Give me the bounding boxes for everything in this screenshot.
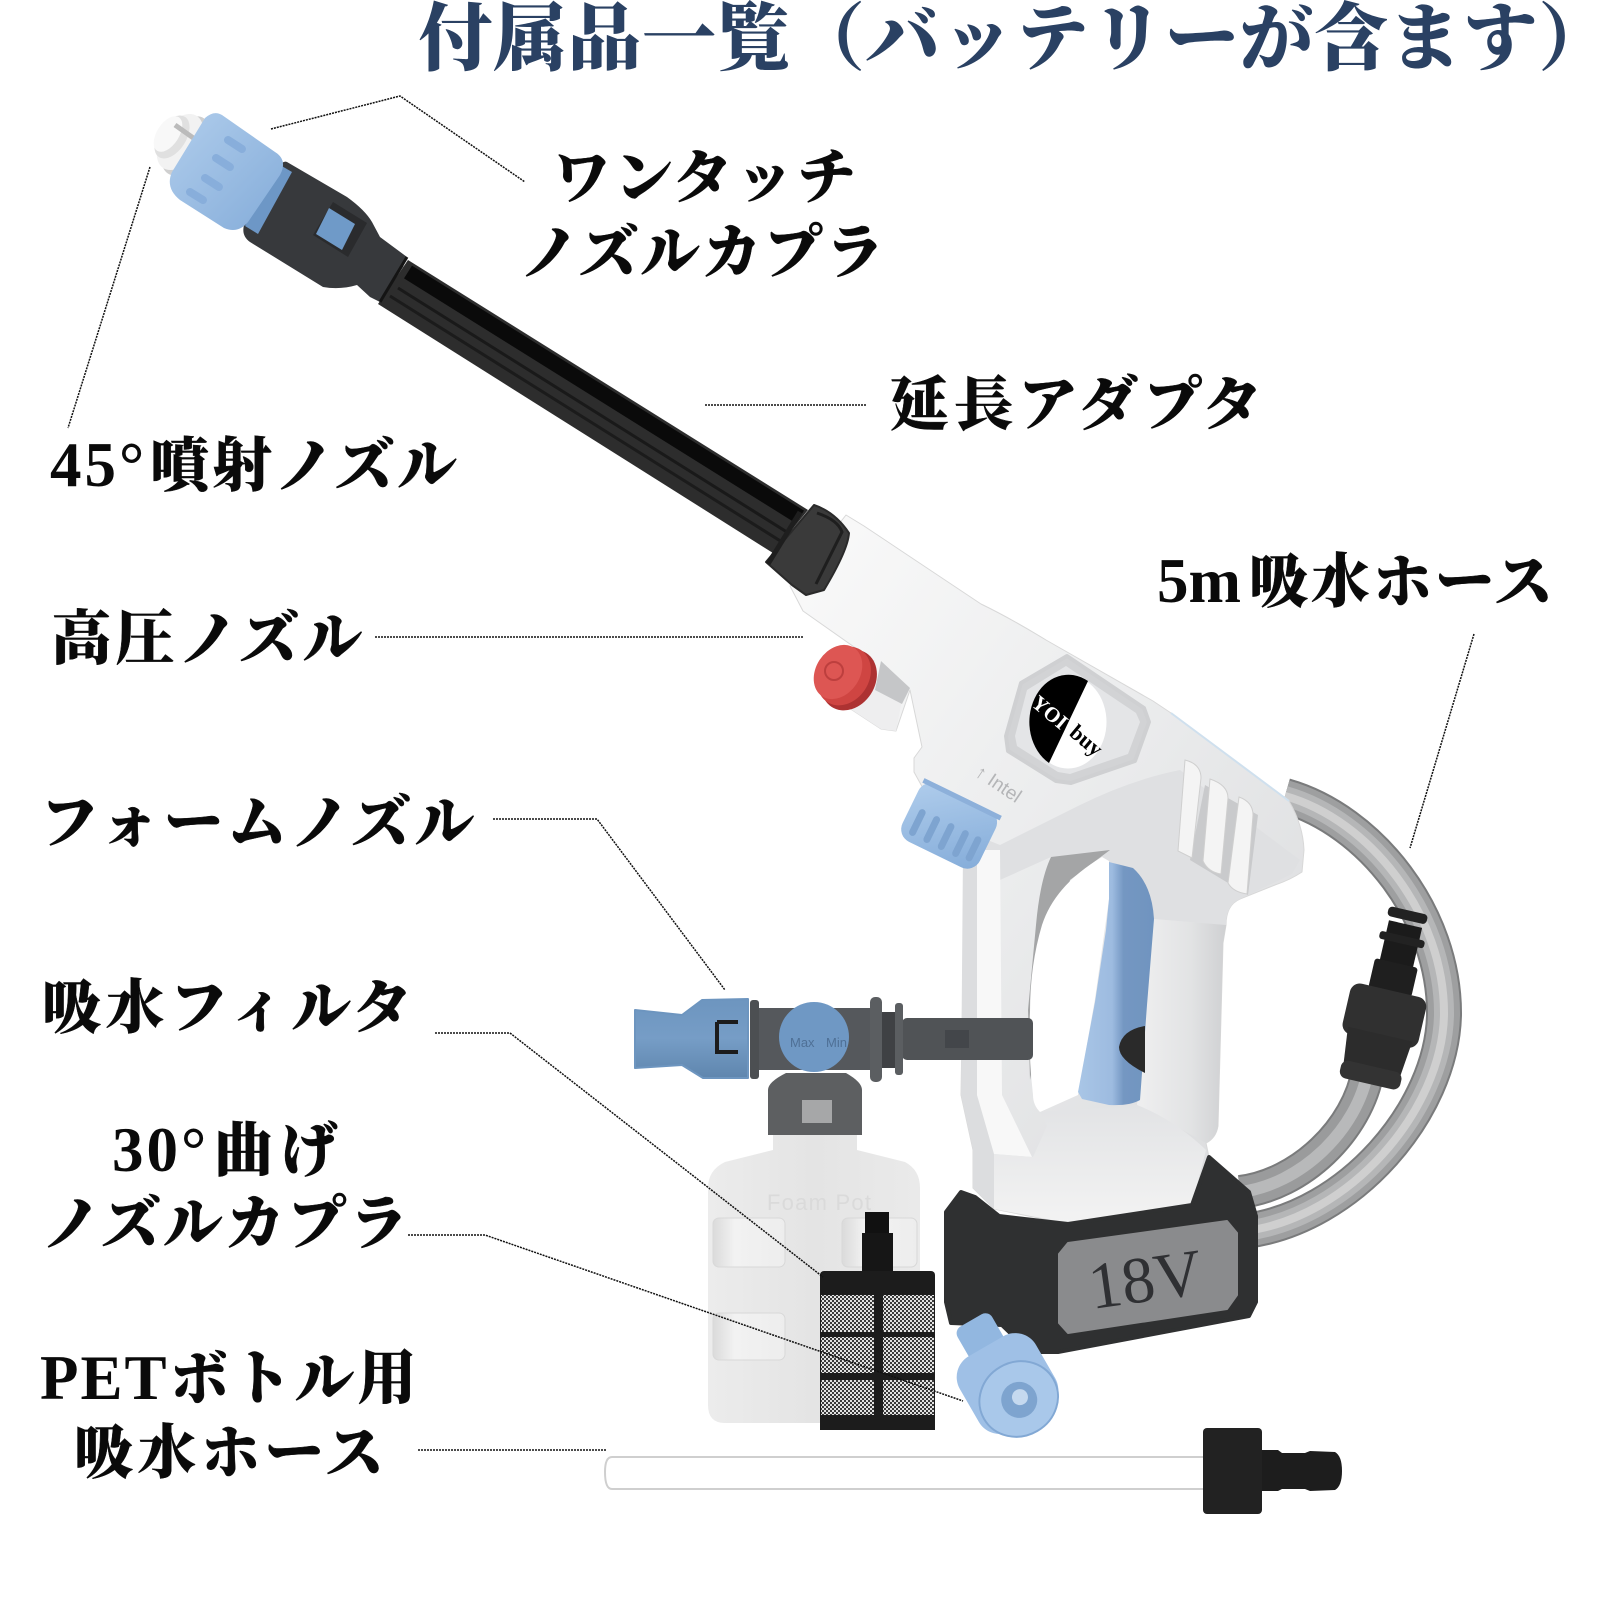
leader: 5m hose <box>1410 634 1474 848</box>
icon: logo plate: YOI <box>1027 690 1073 734</box>
icon: foam cannon: Max <box>790 1035 815 1050</box>
battery housing top <box>994 1105 1206 1223</box>
barrel <box>750 1008 875 1070</box>
icon: blue inlet knob <box>896 778 1002 873</box>
label: one-touch nozzle coupler: ノズルカプラ <box>520 220 884 286</box>
leader: suction filter <box>435 1033 823 1277</box>
leader: high-pressure nozzle <box>375 636 803 638</box>
icon: hose connector <box>1331 902 1447 1093</box>
icon: battery <box>946 1157 1256 1352</box>
icon: wand <box>378 260 808 553</box>
icon: foam cannon <box>635 997 1033 1423</box>
label: high-pressure nozzle: 高圧ノズル <box>52 606 362 672</box>
left strip <box>961 850 994 1209</box>
icon: clear PET hose <box>605 1428 1342 1514</box>
icon: vents <box>1178 760 1258 895</box>
dial <box>779 1002 849 1072</box>
icon: pair of coiled hoses <box>1240 796 1444 1231</box>
label: 45 degree nozzle: 噴射ノズル <box>150 433 460 499</box>
label: suction filter: 吸水フィルタ <box>42 975 412 1041</box>
icon: suction filter <box>820 1212 935 1430</box>
icon: 30 degree coupler <box>933 1298 1074 1454</box>
title: 付属品一覧（バッテリーが含ます） <box>418 0 1600 81</box>
leader: 30 degree coupler <box>408 1235 963 1401</box>
icon: blue nozzle cap <box>170 113 283 230</box>
gun body <box>790 515 1304 1224</box>
leader: foam nozzle <box>493 819 725 990</box>
label: extension adapter: 延長アダプタ <box>890 372 1262 438</box>
label: one-touch nozzle coupler: ワンタッチ <box>552 145 856 211</box>
icon: collar <box>243 162 407 302</box>
leader: PET hose <box>418 1449 607 1451</box>
stem <box>902 1018 1033 1060</box>
label: 5m suction hose: 吸水ホース <box>1249 549 1556 615</box>
trigger opening with hose behind <box>1028 850 1110 1080</box>
leader: 45 degree nozzle <box>68 167 150 428</box>
icon: rubber boot <box>766 505 849 595</box>
label: 45 degree nozzle: 45° <box>50 430 147 500</box>
label: PET bottle suction hose: PET <box>40 1343 169 1413</box>
label: PET bottle suction hose <box>40 1343 420 1486</box>
decorative blue strip <box>1171 713 1289 801</box>
icon: blue inner sleeve <box>245 165 292 234</box>
icon: logo plate <box>1006 656 1149 783</box>
label: 30 degree coupler: 30° <box>112 1115 209 1185</box>
icon: logo plate: buy <box>1065 719 1108 761</box>
label: foam nozzle: フォームノズル <box>40 790 474 856</box>
foam bottle <box>708 1135 920 1423</box>
label: 30 degree coupler <box>42 1115 408 1257</box>
icon: white nozzle tip <box>147 106 221 185</box>
leader: extension adapter <box>705 404 866 406</box>
leader: one-touch coupler <box>271 96 525 182</box>
label: 30 degree coupler: 曲げ <box>214 1118 344 1184</box>
label: 30 degree coupler: ノズルカプラ <box>42 1191 408 1257</box>
icon: intel text: ↑ Intel <box>971 762 1025 807</box>
label: PET bottle suction hose: 吸水ホース <box>74 1420 384 1486</box>
icon: foam cannon: Foam Pot <box>767 1190 871 1215</box>
shaded lower head <box>975 770 1300 925</box>
grip right side <box>1137 919 1226 1143</box>
label: 5m suction hose: 5m <box>1157 546 1241 616</box>
icon: trigger <box>1078 862 1154 1105</box>
icon: foam cannon: Min <box>826 1035 847 1050</box>
neck <box>768 1073 862 1135</box>
icon: red high-pressure nozzle <box>804 636 910 731</box>
blue nozzle <box>635 999 748 1078</box>
label: PET bottle suction hose: ボトル用 <box>170 1346 420 1412</box>
battery voltage text: 18V <box>1084 1236 1207 1324</box>
label: one-touch nozzle coupler <box>520 145 884 286</box>
